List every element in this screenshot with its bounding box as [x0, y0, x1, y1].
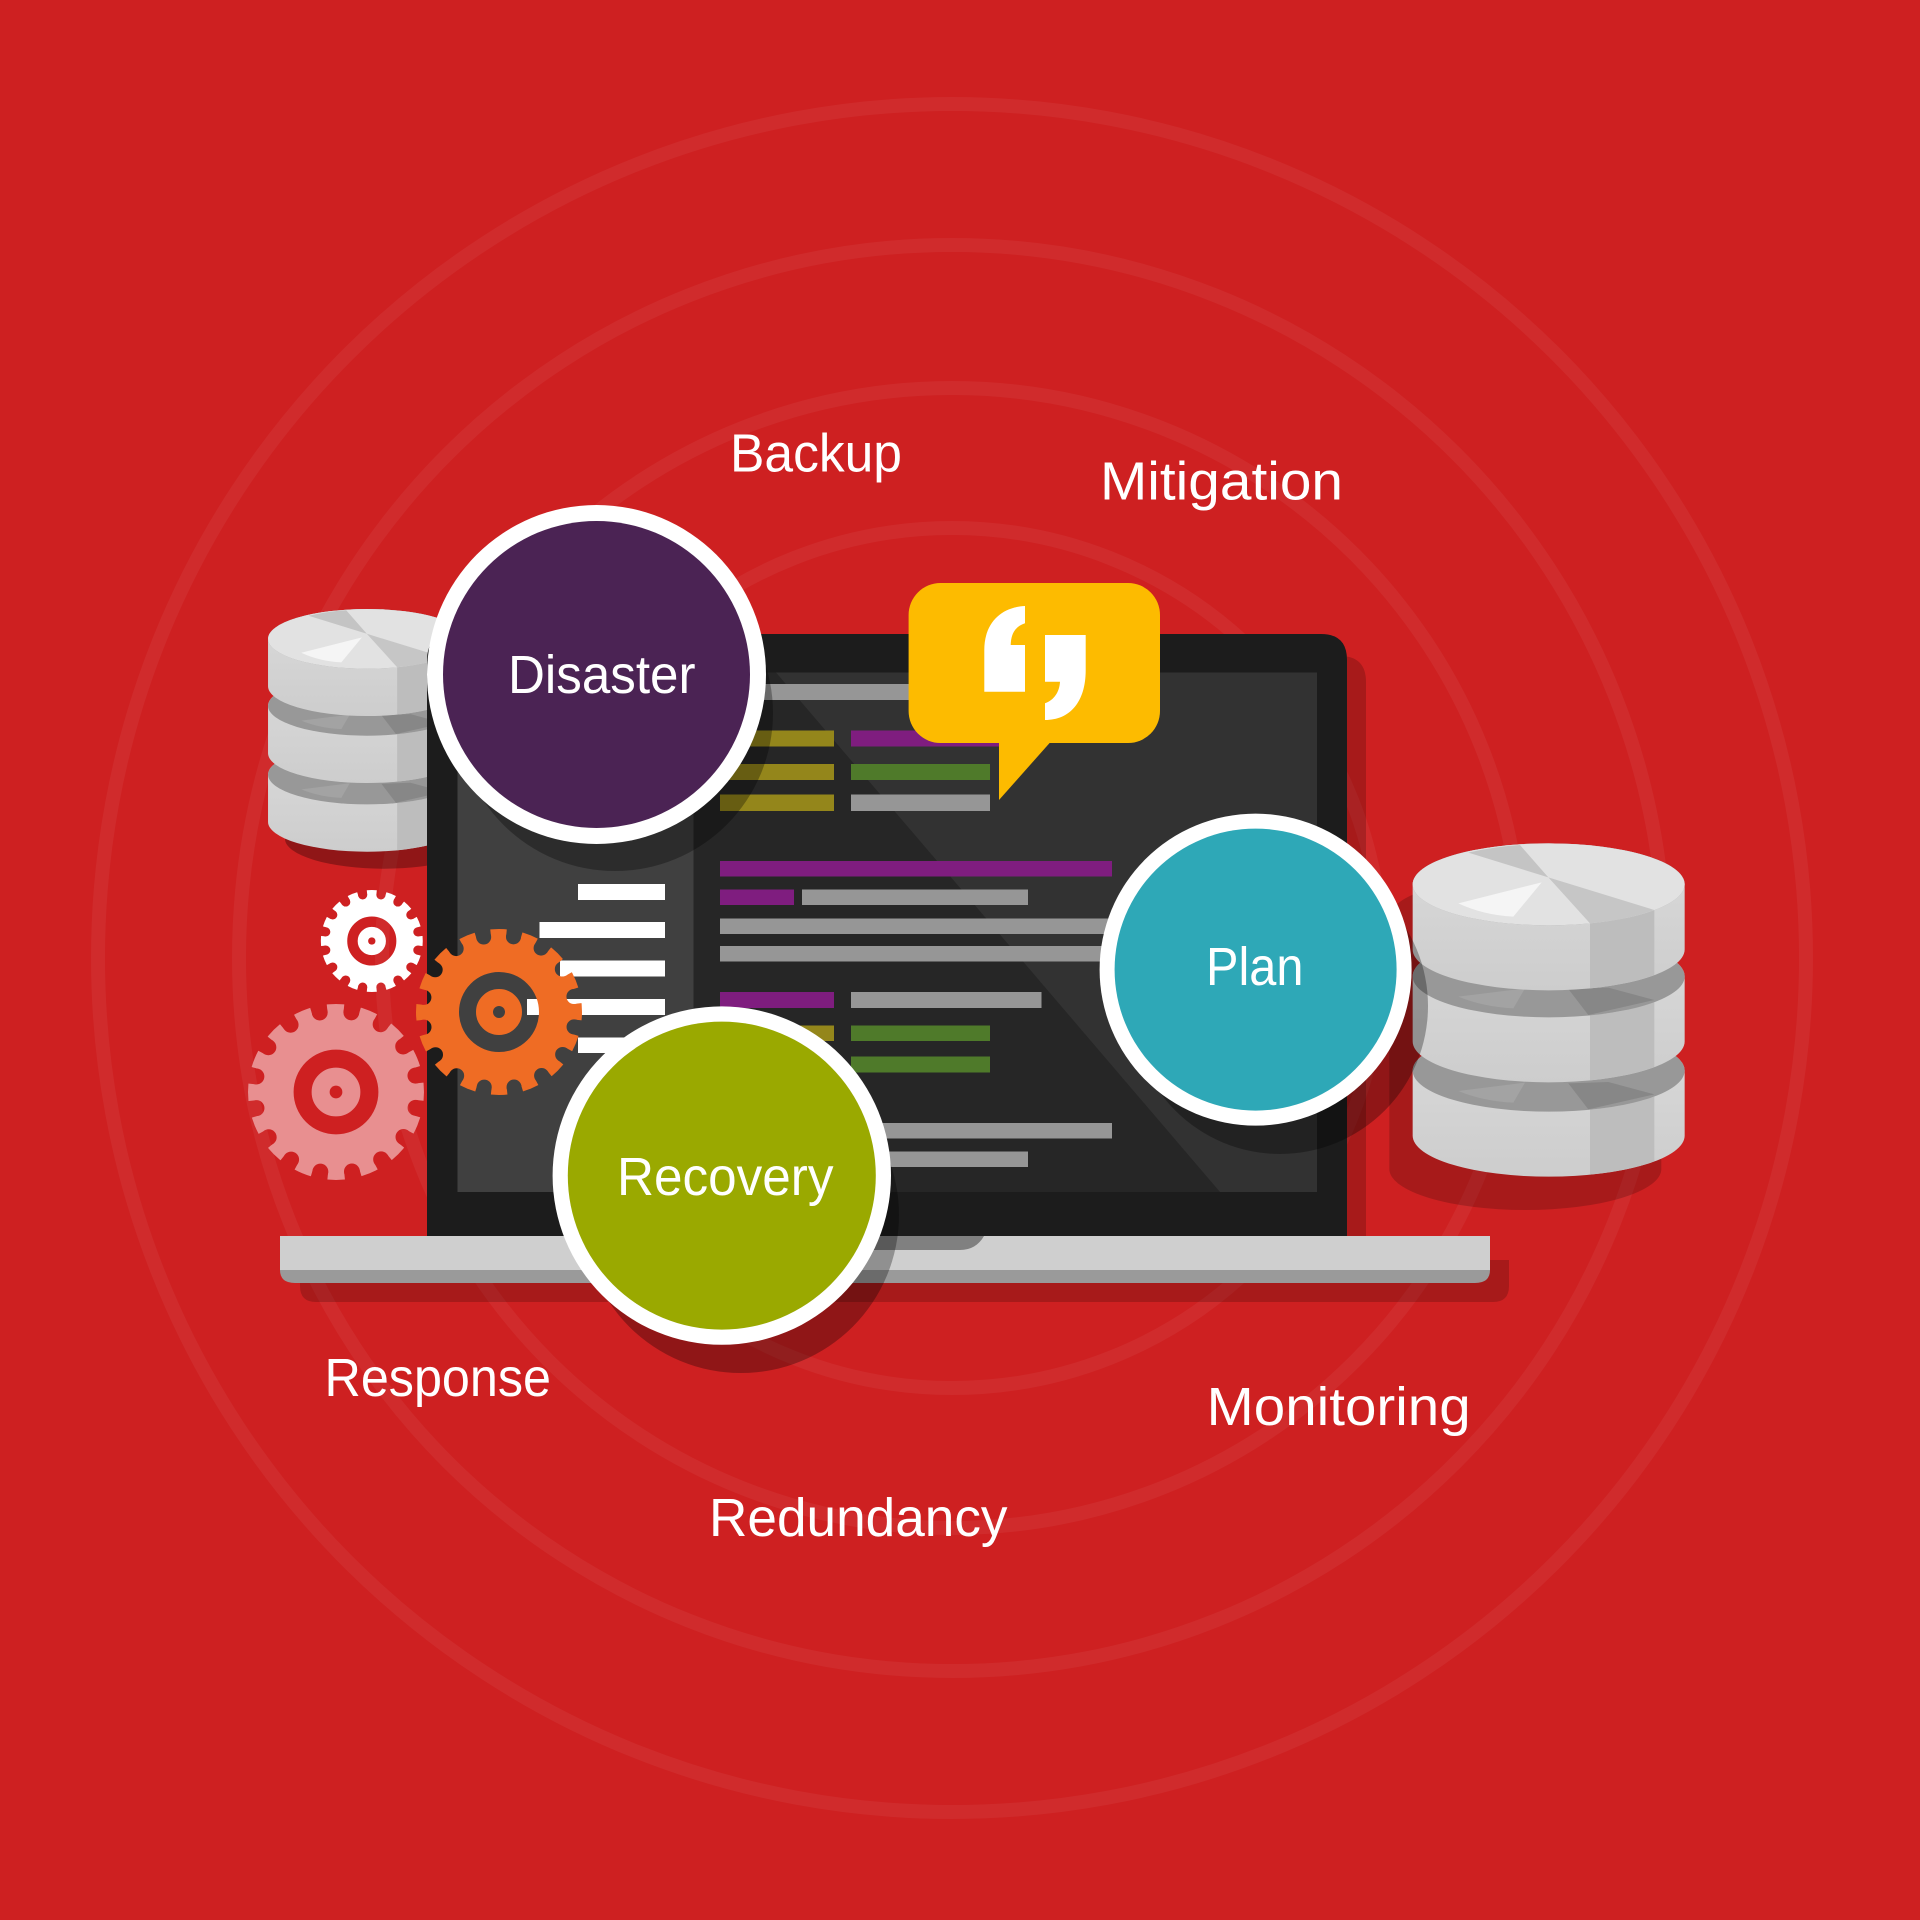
laptop shadow	[300, 656, 1509, 1302]
label: Mitigation: Mitigation	[1100, 451, 1343, 511]
label: Disaster: Disaster	[508, 645, 696, 705]
icon: database left	[268, 609, 483, 869]
keyboard base	[280, 1236, 1490, 1283]
circle: Plan	[1100, 814, 1428, 1154]
label: Plan: Plan	[1206, 937, 1304, 997]
screen	[458, 672, 1317, 1192]
laptop bezel	[427, 634, 1347, 1236]
label: Recovery: Recovery	[617, 1147, 834, 1207]
label: Monitoring: Monitoring	[1207, 1377, 1471, 1437]
code lines	[720, 684, 1120, 1167]
label: Redundancy: Redundancy	[709, 1488, 1008, 1548]
sidebar white lines	[527, 884, 665, 1053]
label: Response: Response	[324, 1348, 551, 1408]
icon: pink gear	[248, 1004, 424, 1180]
icon: quote marks	[984, 606, 1086, 720]
icon: database right	[1389, 843, 1685, 1210]
icon: white gear	[321, 890, 423, 992]
label: Backup: Backup	[730, 424, 902, 484]
icon: orange gear	[416, 929, 582, 1095]
circle: Recovery	[553, 1006, 899, 1373]
circle: Disaster	[427, 505, 773, 871]
speech bubble	[909, 583, 1160, 800]
laptop	[280, 634, 1509, 1302]
